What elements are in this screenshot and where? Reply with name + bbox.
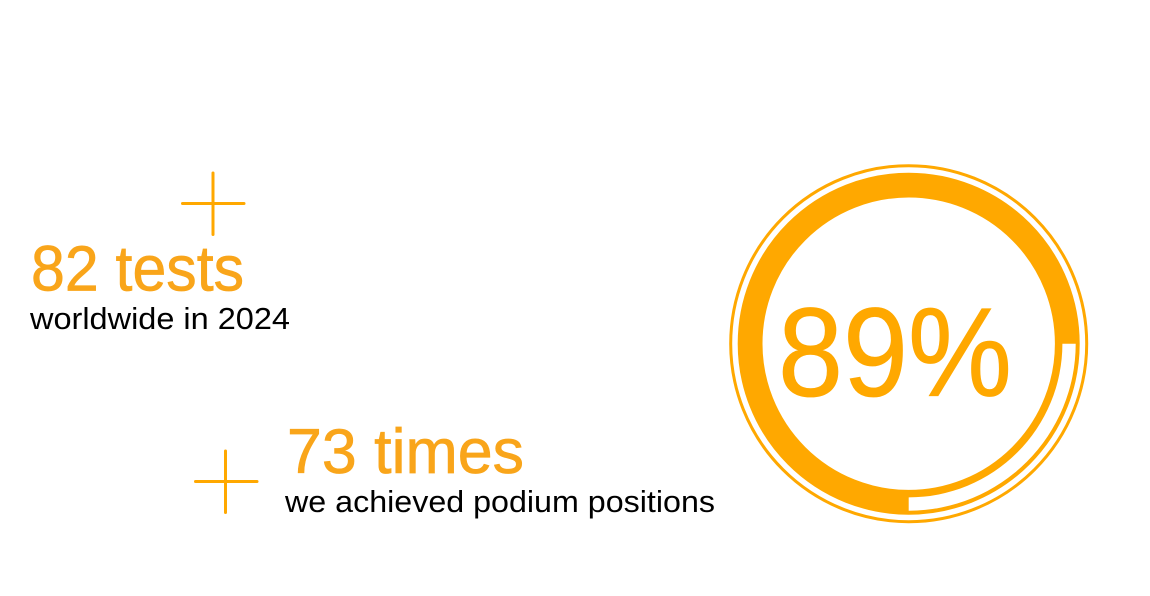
value: 89%: 89% [778,282,1012,423]
chart: 89% progress ring [731,166,1087,522]
outer thin ring [731,166,1087,522]
heading: 73 times: 73 times [287,417,524,487]
text: worldwide in 2024: worldwide in 2024 [29,301,290,336]
heading: 82 tests: 82 tests [31,232,244,304]
stat: 73 times [284,417,715,519]
icon: plus beside 73 times [196,451,257,512]
icon: plus above 82 tests [182,173,244,234]
text: we achieved podium positions: we achieved podium positions [284,484,715,519]
stat: 82 tests [29,232,290,336]
unfilled quadrant of progress ring [909,344,1076,511]
thick progress ring [750,185,1067,502]
